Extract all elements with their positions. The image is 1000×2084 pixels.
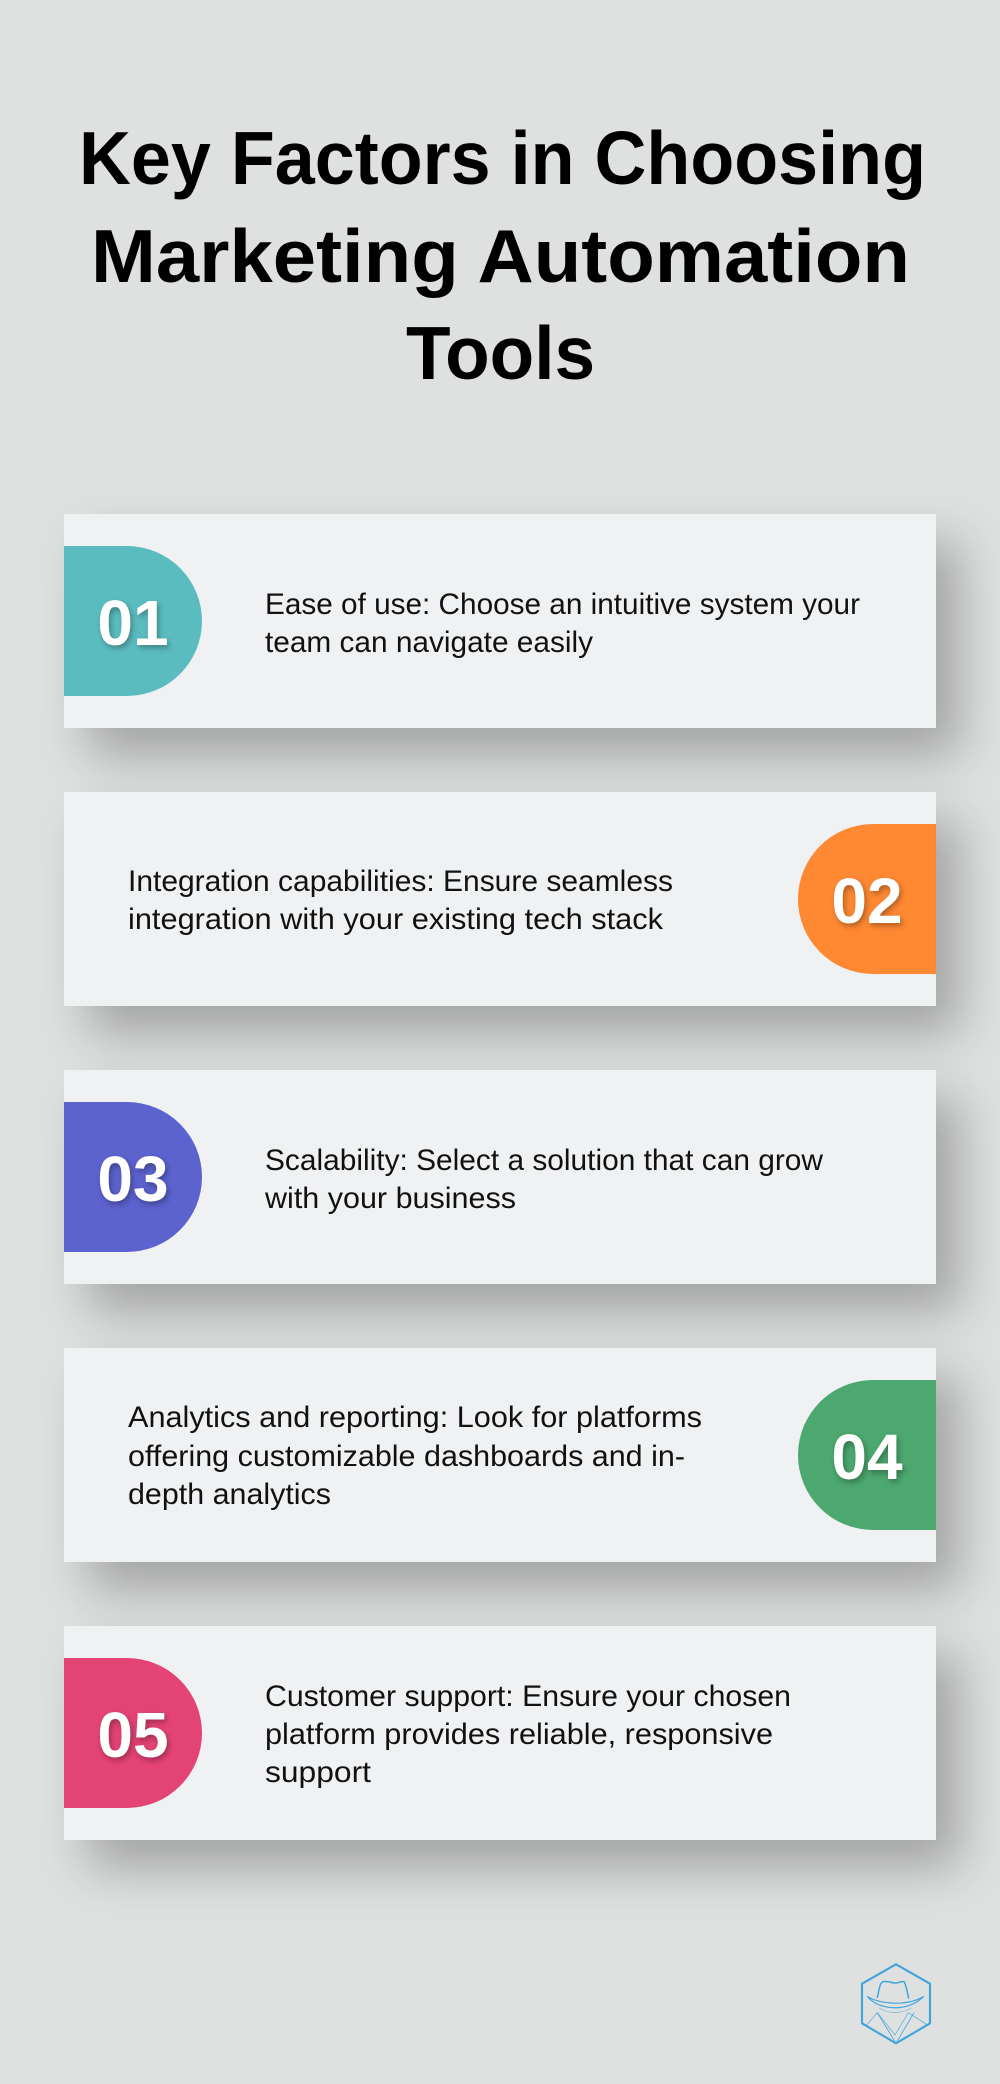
title: Key Factors in Choosing	[79, 116, 926, 200]
text: customer support: support	[265, 1756, 372, 1789]
text: integration capabilities: Integration capabilities: Ensure seamless	[128, 865, 673, 898]
text: analytics and reporting: depth analytics	[128, 1478, 331, 1511]
text: scalability: Scalability: Select a solution that can grow	[265, 1144, 823, 1177]
number badge 02: 02	[831, 865, 903, 937]
title: Marketing Automation	[91, 214, 910, 298]
number badge 01: 01	[97, 587, 169, 659]
text: analytics and reporting: Analytics and reporting: Look for platforms	[128, 1401, 702, 1434]
number badge 03: 03	[97, 1143, 169, 1215]
panel: factor 02	[64, 792, 936, 1006]
number badge 04	[798, 1380, 936, 1530]
text: ease of use	[265, 588, 860, 659]
text: analytics and reporting: offering customizable dashboards and in-	[128, 1440, 685, 1473]
panel: factor 01	[64, 514, 936, 728]
text: customer support	[265, 1680, 791, 1789]
text: customer support: Customer support: Ensure your chosen	[265, 1680, 791, 1713]
panel: factor 04	[64, 1348, 936, 1562]
title	[79, 116, 926, 395]
number badge 01	[64, 546, 202, 696]
text: scalability: with your business	[264, 1182, 516, 1215]
number badge 03	[64, 1102, 202, 1252]
text: ease of use: team can navigate easily	[265, 626, 593, 659]
panel: factor 05	[64, 1626, 936, 1840]
text: integration capabilities: integration with your existing tech stack	[128, 903, 664, 936]
title: Tools	[406, 311, 595, 395]
text: ease of use: Ease of use: Choose an intuitive system your	[265, 588, 860, 621]
text: customer support: platform provides reliable, responsive	[265, 1718, 773, 1751]
text: integration capabilities	[128, 865, 673, 936]
number badge 05: 05	[97, 1699, 169, 1771]
number badge 02	[798, 824, 936, 974]
number badge 05	[64, 1658, 202, 1808]
text: scalability	[264, 1144, 823, 1215]
text: analytics and reporting	[128, 1401, 702, 1511]
number badge 04: 04	[831, 1421, 903, 1493]
panel: factor 03	[64, 1070, 936, 1284]
